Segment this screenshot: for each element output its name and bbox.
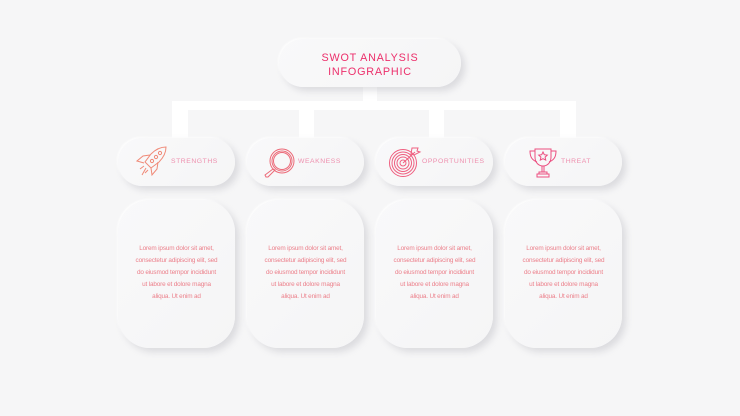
body text: do eiusmod tempor incididunt xyxy=(395,269,474,276)
pill: opportunities xyxy=(376,138,493,186)
pill: weakness xyxy=(247,138,364,186)
connector lines xyxy=(172,93,576,136)
body text xyxy=(522,245,604,300)
body text: Lorem ipsum dolor sit amet, xyxy=(139,245,214,252)
title pill: SWOT ANALYSIS xyxy=(321,52,418,64)
body text: aliqua. Ut enim ad xyxy=(152,293,201,300)
label: strengths: STRENGTHS xyxy=(171,158,218,165)
body text: ut labore et dolore magna xyxy=(400,281,469,288)
label: threat: THREAT xyxy=(561,158,591,165)
body text: consectetur adipiscing elit, sed xyxy=(394,257,475,264)
body text: ut labore et dolore magna xyxy=(142,281,211,288)
body text: consectetur adipiscing elit, sed xyxy=(136,257,217,264)
body text: aliqua. Ut enim ad xyxy=(539,293,588,300)
card: strengths xyxy=(118,200,235,348)
body text: aliqua. Ut enim ad xyxy=(281,293,330,300)
body text: consectetur adipiscing elit, sed xyxy=(523,257,604,264)
body text: do eiusmod tempor incididunt xyxy=(524,269,603,276)
body text xyxy=(394,245,476,300)
body text: do eiusmod tempor incididunt xyxy=(137,269,216,276)
label: opportunities: OPPORTUNITIES xyxy=(422,158,485,165)
body text xyxy=(264,245,346,300)
title pill: INFOGRAPHIC xyxy=(328,66,412,78)
icon: trophy xyxy=(530,148,556,178)
card: opportunities xyxy=(376,200,493,348)
body text: ut labore et dolore magna xyxy=(271,281,340,288)
body text: Lorem ipsum dolor sit amet, xyxy=(268,245,343,252)
label: weakness: WEAKNESS xyxy=(298,158,341,165)
icon: rocket xyxy=(136,146,166,176)
pill: threat xyxy=(505,138,622,186)
pill: strengths xyxy=(118,138,235,186)
body text: do eiusmod tempor incididunt xyxy=(266,269,345,276)
icon: target xyxy=(389,148,422,177)
body text: ut labore et dolore magna xyxy=(529,281,598,288)
card: weakness xyxy=(247,200,364,348)
body text: consectetur adipiscing elit, sed xyxy=(265,257,346,264)
body text xyxy=(136,245,218,300)
body text: aliqua. Ut enim ad xyxy=(410,293,459,300)
card: threat xyxy=(505,200,622,348)
body text: Lorem ipsum dolor sit amet, xyxy=(526,245,601,252)
body text: Lorem ipsum dolor sit amet, xyxy=(397,245,472,252)
title pill xyxy=(279,39,461,87)
icon: magnifying glass xyxy=(264,148,294,178)
